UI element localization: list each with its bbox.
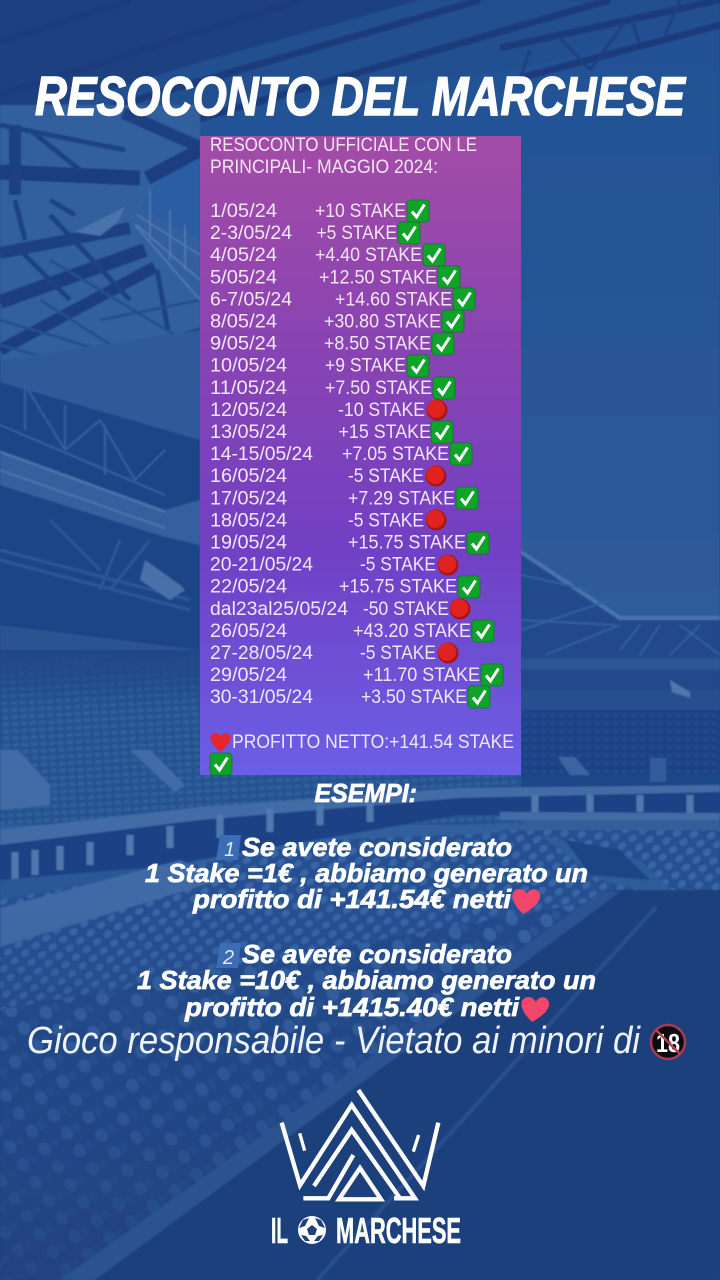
row 13/05/24: +15 STAKE [338, 421, 431, 443]
row 27-28/05/24: 27-28/05/24 [210, 642, 313, 664]
row 29/05/24: 29/05/24 [210, 664, 287, 686]
row 17/05/24: +7.29 STAKE [348, 487, 455, 509]
panel heading: RESOCONTO UFFICIALE CON LE [210, 134, 477, 156]
row 10/05/24: 10/05/24 [210, 355, 287, 377]
heading: examples: ESEMPI: [314, 778, 417, 808]
row 16/05/24: -5 STAKE [348, 465, 424, 487]
net profit line [210, 731, 514, 775]
background: roof glass panels left [0, 105, 200, 400]
row 17/05/24 [210, 487, 478, 509]
logo: wordmark: MARCHESE [336, 1210, 461, 1251]
example 2 text [137, 939, 596, 1022]
row 22/05/24: 22/05/24 [210, 576, 287, 598]
icon: football [298, 1216, 326, 1244]
row 5/05/24: 5/05/24 [210, 266, 277, 288]
background: lower seats [0, 830, 720, 1280]
panel heading [210, 134, 477, 178]
row 27-28/05/24: -5 STAKE [360, 642, 436, 664]
row 5/05/24 [210, 266, 460, 288]
row 9/05/24: 9/05/24 [210, 333, 277, 355]
example 2 text: Se avete considerato [242, 939, 512, 969]
icon: no under 18: 18 [656, 1028, 680, 1058]
row 16/05/24 [210, 465, 446, 487]
row dal23al25/05/24: dal23al25/05/24 [210, 598, 348, 620]
row 12/05/24: 12/05/24 [210, 399, 287, 421]
background: middle seats [0, 650, 720, 825]
row 12/05/24 [210, 399, 448, 421]
net profit line: PROFITTO NETTO:+141.54 STAKE [232, 731, 514, 753]
background: pitch [60, 890, 720, 1280]
row 22/05/24 [210, 576, 480, 598]
row 29/05/24: +11.70 STAKE [363, 664, 480, 686]
row 2-3/05/24 [210, 222, 420, 244]
row 16/05/24: 16/05/24 [210, 465, 287, 487]
row 6-7/05/24: +14.60 STAKE [335, 288, 452, 310]
background: truss and catwalk left [0, 330, 200, 665]
icon: keycap 2: 2 [222, 947, 234, 969]
row 4/05/24 [210, 244, 445, 266]
row 30-31/05/24: 30-31/05/24 [210, 686, 313, 708]
row 4/05/24: +4.40 STAKE [315, 244, 422, 266]
icon: heart [512, 889, 540, 914]
row 18/05/24 [210, 509, 446, 531]
icon: keycap 1 [216, 835, 241, 861]
logo: crown [282, 1090, 438, 1199]
row 27-28/05/24 [210, 642, 458, 664]
row 2-3/05/24: 2-3/05/24 [210, 222, 292, 244]
row 29/05/24 [210, 664, 503, 686]
row 30-31/05/24: +3.50 STAKE [361, 686, 467, 708]
row 8/05/24: 8/05/24 [210, 310, 277, 332]
row 6-7/05/24: 6-7/05/24 [210, 288, 292, 310]
row dal23al25/05/24: -50 STAKE [363, 598, 449, 620]
example 2 text: profitto di +1415.40€ netti [184, 992, 520, 1022]
panel: monthly report [200, 134, 521, 775]
row 5/05/24: +12.50 STAKE [319, 266, 437, 288]
example 1 text [145, 832, 588, 914]
row 12/05/24: -10 STAKE [338, 399, 425, 421]
row 4/05/24: 4/05/24 [210, 244, 277, 266]
row 20-21/05/24 [210, 554, 458, 576]
example 1 text: 1 Stake =1€ , abbiamo generato un [145, 858, 588, 888]
row 20-21/05/24: 20-21/05/24 [210, 554, 313, 576]
row 26/05/24: +43.20 STAKE [353, 620, 471, 642]
row 26/05/24: 26/05/24 [210, 620, 287, 642]
row 11/05/24: +7.50 STAKE [325, 377, 432, 399]
row 30-31/05/24 [210, 686, 490, 708]
row 14-15/05/24: +7.05 STAKE [342, 443, 449, 465]
row 17/05/24: 17/05/24 [210, 487, 287, 509]
row 8/05/24: +30.80 STAKE [324, 310, 441, 332]
row 20-21/05/24: -5 STAKE [360, 554, 436, 576]
example 2 text: 1 Stake =10€ , abbiamo generato un [137, 965, 596, 995]
background: right stadium roofline and upper tier [521, 552, 720, 720]
example 1 text: profitto di +141.54€ netti [192, 884, 512, 914]
row 6-7/05/24 [210, 288, 475, 310]
row 13/05/24: 13/05/24 [210, 421, 287, 443]
icon: keycap 2 [216, 943, 241, 969]
row 9/05/24: +8.50 STAKE [324, 333, 431, 355]
icon: keycap 1: 1 [224, 839, 235, 861]
row 19/05/24: 19/05/24 [210, 532, 287, 554]
background: concourse bands [0, 785, 720, 905]
row 26/05/24 [210, 620, 494, 642]
background: roof structure top [0, 0, 720, 130]
example 1 text: Se avete considerato [242, 832, 512, 862]
icon: heart [521, 997, 549, 1022]
row 13/05/24 [210, 421, 453, 443]
row 19/05/24 [210, 532, 489, 554]
row 1/05/24 [210, 200, 429, 222]
row 14-15/05/24 [210, 443, 472, 465]
logo: wordmark [271, 1210, 461, 1251]
row 19/05/24: +15.75 STAKE [348, 532, 466, 554]
panel heading: PRINCIPALI- MAGGIO 2024: [210, 156, 438, 178]
row 14-15/05/24: 14-15/05/24 [210, 443, 313, 465]
row 11/05/24: 11/05/24 [210, 377, 287, 399]
responsible gaming notice: Gioco responsabile - Vietato ai minori di [27, 1020, 641, 1062]
row 2-3/05/24: +5 STAKE [316, 222, 397, 244]
row 18/05/24: -5 STAKE [348, 509, 424, 531]
row 22/05/24: +15.75 STAKE [339, 576, 457, 598]
row dal23al25/05/24 [210, 598, 470, 620]
logo: wordmark: IL [271, 1210, 288, 1251]
row 1/05/24: 1/05/24 [210, 200, 277, 222]
row 9/05/24 [210, 333, 454, 355]
row 10/05/24 [210, 355, 429, 377]
row 11/05/24 [210, 377, 455, 399]
row 8/05/24 [210, 310, 464, 332]
row 10/05/24: +9 STAKE [325, 355, 406, 377]
row 1/05/24: +10 STAKE [315, 200, 406, 222]
row 18/05/24: 18/05/24 [210, 509, 287, 531]
